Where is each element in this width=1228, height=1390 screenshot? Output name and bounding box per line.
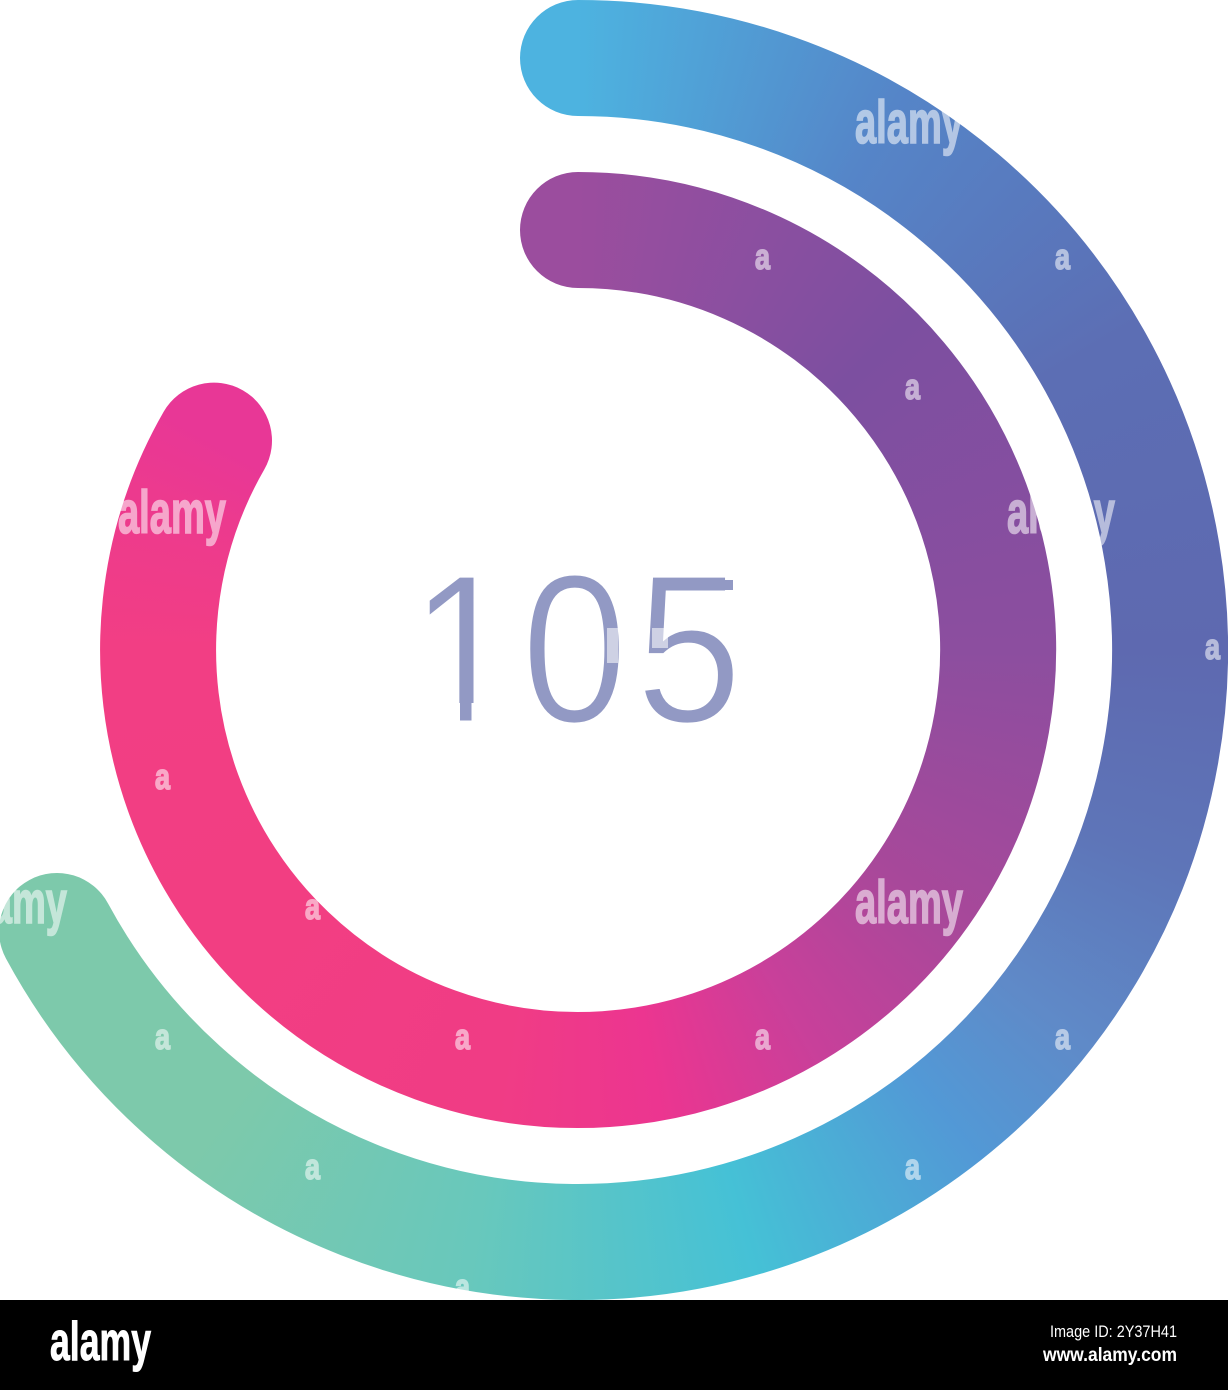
watermark overlay: alamy xyxy=(855,869,963,936)
watermark overlay: alamy xyxy=(1007,479,1115,546)
watermark overlay: a xyxy=(455,1016,471,1057)
watermark overlay: a xyxy=(455,1266,471,1307)
watermark overlay: a xyxy=(755,236,771,277)
watermark overlay: a xyxy=(905,1146,921,1187)
watermark overlay: a xyxy=(1205,626,1221,667)
watermark overlay: a xyxy=(1055,236,1071,277)
inner ring: purple to pink progress arc xyxy=(100,172,1056,1128)
watermark overlay: a xyxy=(305,1146,321,1187)
watermark overlay: alamy xyxy=(855,89,963,156)
black footer bar xyxy=(0,1300,1228,1390)
watermark overlay: a xyxy=(155,1016,171,1057)
watermark overlay: a xyxy=(905,366,921,407)
watermark overlay: alamy xyxy=(118,479,226,546)
watermark overlay: a xyxy=(305,886,321,927)
footer image id: Image ID: 2Y37H41 xyxy=(1050,1322,1177,1341)
footer logo: alamy xyxy=(50,1310,151,1372)
watermark overlay: a xyxy=(155,756,171,797)
center value 105: 105 xyxy=(410,530,742,767)
watermark overlay: a xyxy=(1055,1016,1071,1057)
footer website: www.alamy.com xyxy=(1042,1345,1177,1366)
watermark overlay: a xyxy=(755,1016,771,1057)
